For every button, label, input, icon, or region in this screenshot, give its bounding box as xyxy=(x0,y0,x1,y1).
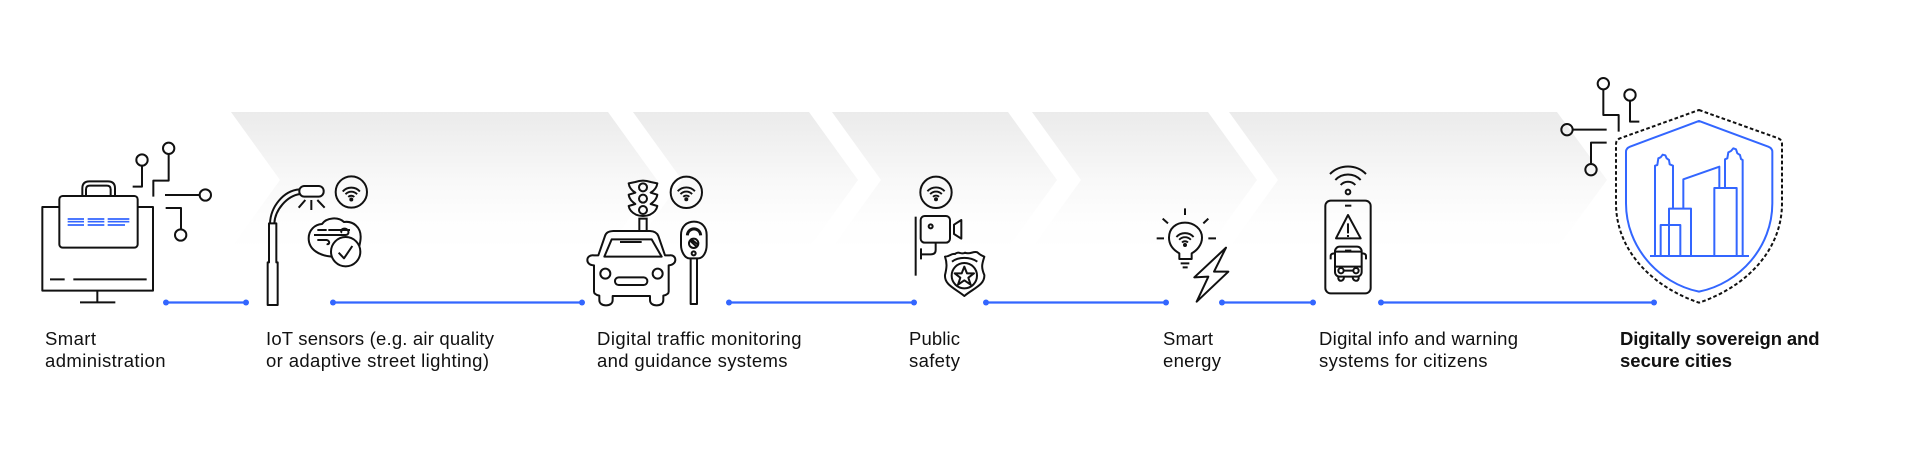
connector line 2 xyxy=(330,300,585,306)
icon: camera, police badge xyxy=(916,177,984,296)
label: IoT sensors: or adaptive street lighting) xyxy=(266,350,489,371)
connector line 5 xyxy=(1219,300,1316,306)
icon: wifi badge 3 xyxy=(927,187,945,201)
label: Smart energy: energy xyxy=(1163,350,1222,371)
label: Public safety: Public xyxy=(909,328,960,349)
connector line 4 xyxy=(983,300,1169,306)
icon: wifi in bulb xyxy=(1176,233,1194,247)
label: Smart administration: administration xyxy=(45,350,166,371)
label: Digitally sovereign and secure cities xyxy=(1620,328,1820,371)
label: Digital info and warning: Digital info and warning xyxy=(1319,328,1518,349)
icon: street lamp with wifi and air quality xyxy=(268,176,367,305)
label: Smart administration xyxy=(45,328,166,371)
connector line 3 xyxy=(726,300,917,306)
icon: computer with briefcase and circuit xyxy=(42,143,211,302)
label: Smart energy xyxy=(1163,328,1222,371)
icon: wifi badge 2 xyxy=(678,187,695,201)
label: Public safety: safety xyxy=(909,350,961,371)
label: Digital info and warning: systems for citizens xyxy=(1319,350,1488,371)
connector line 6 xyxy=(1378,300,1657,306)
label: Digital info and warning xyxy=(1319,328,1518,371)
label: Smart administration: Smart xyxy=(45,328,96,349)
icon: smart bulb and lightning xyxy=(1157,208,1228,302)
chevron band xyxy=(231,112,1607,248)
label: Smart energy: Smart xyxy=(1163,328,1213,349)
connector line 1 xyxy=(163,300,249,306)
icon: secure city shield xyxy=(1561,78,1782,303)
label: Digitally sovereign and secure cities: secure cities xyxy=(1620,350,1732,371)
label: IoT sensors xyxy=(266,328,495,371)
label: Public safety xyxy=(909,328,961,371)
label: IoT sensors: IoT sensors (e.g. air quality xyxy=(266,328,495,349)
icon: car, traffic light and parking meter xyxy=(587,177,707,305)
label: Digital traffic monitoring xyxy=(597,328,802,371)
label: Digitally sovereign and secure cities: Digitally sovereign and xyxy=(1620,328,1820,349)
icon: phone with alert and bus xyxy=(1325,166,1371,293)
label: Digital traffic monitoring: and guidance systems xyxy=(597,350,788,371)
icon: wifi badge 1 xyxy=(343,188,360,202)
label: Digital traffic monitoring: Digital traffic monitoring xyxy=(597,328,802,349)
